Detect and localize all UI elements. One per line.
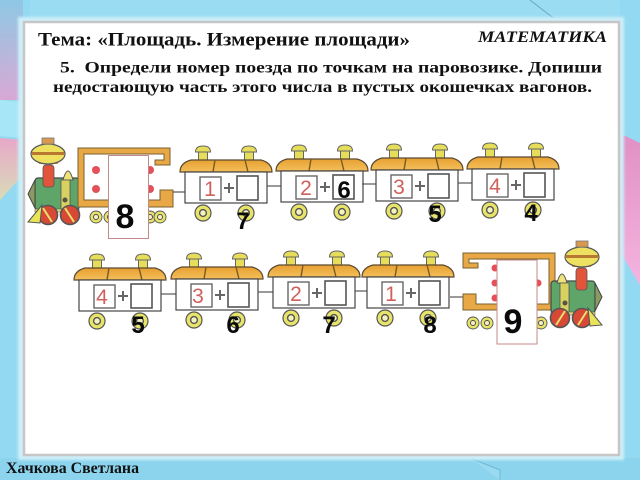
answer digits: bottom row: 7 [322, 312, 336, 339]
locomotive: top [28, 138, 185, 224]
wagon 2 [267, 145, 368, 220]
wagon 2: 2 [300, 177, 312, 200]
answer digits: bottom row: 6 [226, 312, 240, 339]
wagon 1: 1 [204, 178, 216, 201]
wagon 4: 4 [489, 175, 501, 198]
title: Тема: «Площадь. Измерение площади» [38, 30, 410, 50]
task text: 5. Определи номер поезда по точкам на паровозике. Допиши [60, 60, 602, 76]
answer card: 8: 8 [116, 198, 134, 236]
locomotive: bottom [450, 241, 602, 329]
answer card: 9: 9 [504, 303, 522, 341]
answer digits: top row: 6 [337, 177, 351, 204]
wagon 3 bottom: 3 [192, 285, 204, 308]
answer digits: top row: 7 [236, 208, 250, 235]
answer card: 8 [108, 156, 148, 238]
wagon 3: 3 [393, 176, 405, 199]
answer digits: bottom row: 8 [423, 312, 437, 339]
wagon 4 [458, 143, 559, 218]
answer digits: top row: 5 [428, 201, 442, 228]
task text: недостающую часть этого числа в пустых окошечках вагонов. [53, 79, 592, 96]
answer digits: top row [236, 177, 538, 235]
answer digits: bottom row [131, 312, 437, 339]
wagon 4 bottom [74, 254, 166, 329]
wagon 1 [180, 146, 272, 221]
wagon 1 bottom: 1 [385, 283, 397, 306]
answer card: 9 [497, 260, 537, 344]
author: Хачкова Светлана [6, 460, 139, 477]
wagon 4 bottom: 4 [96, 286, 108, 309]
wagon 3 bottom [161, 253, 263, 328]
top train [28, 138, 559, 224]
wagon 2 bottom: 2 [290, 283, 302, 306]
bottom train [74, 241, 602, 329]
wagon 2 bottom [258, 251, 360, 326]
wagon 1 bottom [355, 251, 454, 326]
answer digits: top row: 4 [524, 200, 538, 227]
wagon 3 [362, 144, 463, 219]
answer digits: bottom row: 5 [131, 312, 145, 339]
subject label: МАТЕМАТИКА [477, 29, 607, 46]
task text [53, 60, 602, 96]
